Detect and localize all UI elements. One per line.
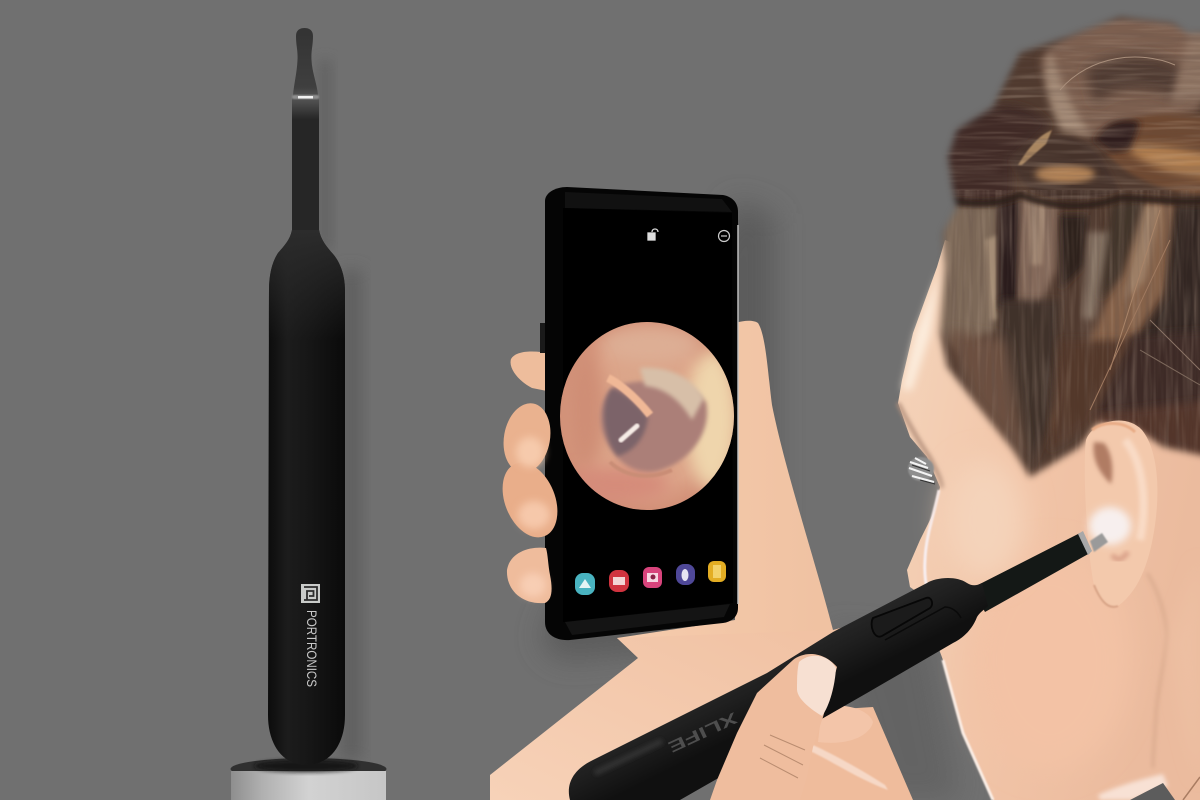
app icon: camera — [643, 567, 662, 588]
finger highlight — [808, 745, 888, 790]
lower finger base — [760, 707, 913, 800]
soft drop shadows — [318, 60, 960, 800]
pen brand: XLIFE — [665, 708, 739, 755]
app icon: contacts — [676, 564, 695, 585]
app icon: video — [609, 570, 629, 592]
device body — [268, 230, 345, 765]
knuckle lines — [760, 735, 805, 778]
thumb holding pen — [710, 654, 837, 800]
pedestal — [230, 758, 386, 800]
top hair mass — [1040, 18, 1200, 136]
palm and wrist of hand holding phone — [617, 321, 880, 720]
forearm and palm — [490, 620, 870, 800]
infographic scene — [230, 14, 1200, 800]
status icon: lock — [648, 229, 658, 240]
thumbnail — [797, 656, 836, 716]
lower hair mass — [1000, 300, 1060, 470]
pen body — [569, 578, 988, 800]
fine strand lines — [1060, 57, 1200, 410]
cheek shading — [970, 550, 1130, 770]
app icon: gallery — [575, 573, 595, 595]
pen button — [872, 598, 932, 637]
screen — [563, 208, 733, 622]
neck gap — [1130, 783, 1175, 800]
hair strand texture — [930, 190, 1200, 480]
index fingertip behind phone — [511, 351, 552, 392]
temple shading — [898, 403, 942, 488]
phone body — [545, 187, 738, 640]
ear canal camera view — [555, 318, 740, 514]
ear camera pen in use — [569, 531, 1092, 800]
jaw highlight — [1098, 774, 1168, 800]
product: Portronics ear camera on pedestal — [230, 28, 386, 800]
vertical strands below knot — [935, 205, 998, 350]
forehead highlight — [902, 270, 940, 390]
app icon: notes — [708, 561, 726, 582]
pen end highlight — [597, 742, 660, 772]
fingers gripping phone — [492, 400, 568, 603]
smartphone — [540, 187, 740, 640]
fingertip under pen — [818, 706, 873, 743]
skin — [898, 240, 1200, 800]
pen seam — [885, 607, 961, 640]
brand logo — [301, 584, 320, 603]
right braid loop — [1095, 114, 1200, 195]
cheek edge highlight — [925, 490, 939, 592]
pen stem and tip — [972, 531, 1092, 612]
braid shadow band — [945, 195, 1200, 206]
hair — [935, 14, 1200, 480]
light glow in ear — [1089, 507, 1131, 552]
earring — [908, 457, 935, 484]
dark left loop — [948, 105, 1047, 200]
central braid knot — [1010, 136, 1120, 201]
status icon: rotate — [718, 230, 730, 242]
woman's head, face and neck — [898, 240, 1200, 800]
lower hand behind pen — [490, 620, 913, 800]
brand name: PORTRONICS — [304, 610, 319, 687]
device stem and tip — [292, 28, 319, 238]
ear — [1085, 421, 1157, 607]
neck crease — [1147, 573, 1167, 768]
